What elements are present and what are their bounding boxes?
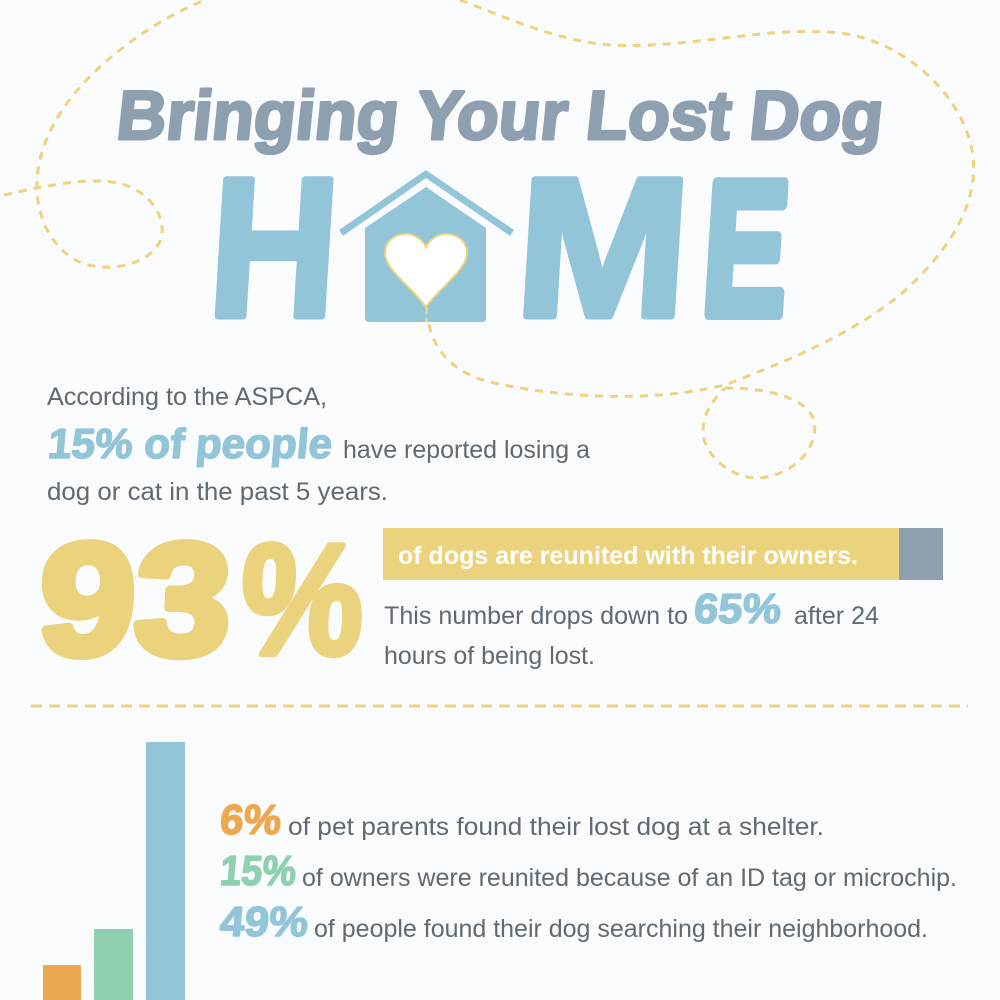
- title word: HOME: [203, 137, 794, 358]
- stat bar: of dogs are reunited with their owners.: [398, 542, 858, 570]
- intro text block: have reported losing a: [343, 436, 590, 464]
- letter H: H: [203, 137, 345, 358]
- big stat: 93%: %: [236, 511, 368, 688]
- stat line: ID tag: of owners were reunited because of an ID tag or microchip.: [302, 864, 957, 892]
- stat line: neighborhood: 49%: [218, 898, 310, 945]
- big stat: 93%: [35, 511, 368, 688]
- stat line: shelter: of pet parents found their lost dog at a shelter.: [288, 813, 824, 841]
- highlight: 65%: 65%: [692, 585, 783, 632]
- dashed divider: [31, 704, 968, 708]
- stat explanation: after 24: [794, 602, 879, 630]
- house body: [365, 187, 486, 322]
- trail start at heart tip: [425, 307, 428, 322]
- stat explanation: This number drops down to: [384, 602, 688, 630]
- letter E: E: [697, 143, 794, 355]
- intro text block: According to the ASPCA,: [47, 383, 327, 411]
- bar chart: [43, 742, 185, 1000]
- dashed paw trail: right path to house: [427, 0, 974, 396]
- stat line: neighborhood: of people found their dog searching their neighborhood.: [314, 915, 928, 943]
- big stat: 93%: 93: [35, 511, 235, 688]
- highlight: 15% of people: 15% of people: [46, 420, 334, 467]
- stat line: shelter: [218, 796, 824, 843]
- stat explanation: hours of being lost.: [384, 642, 595, 670]
- roof: [339, 170, 514, 236]
- stat explanation: [384, 585, 879, 670]
- dashed paw trail: lower right loop: [703, 388, 815, 478]
- intro text block: [46, 383, 590, 506]
- stat line: ID tag: 15%: [218, 847, 298, 894]
- intro text block: dog or cat in the past 5 years.: [47, 478, 388, 506]
- icon: dog house with heart: [339, 170, 514, 322]
- title line: Bringing Your Lost Dog: [113, 76, 888, 154]
- stat line: shelter: 6%: [218, 796, 283, 843]
- dashed paw trail: upper left loop: [4, 0, 205, 267]
- stat bar: [383, 528, 943, 580]
- stat line: ID tag: [218, 847, 957, 894]
- stat line: neighborhood: [218, 898, 928, 945]
- heart: [385, 234, 467, 307]
- letter M: M: [510, 137, 696, 358]
